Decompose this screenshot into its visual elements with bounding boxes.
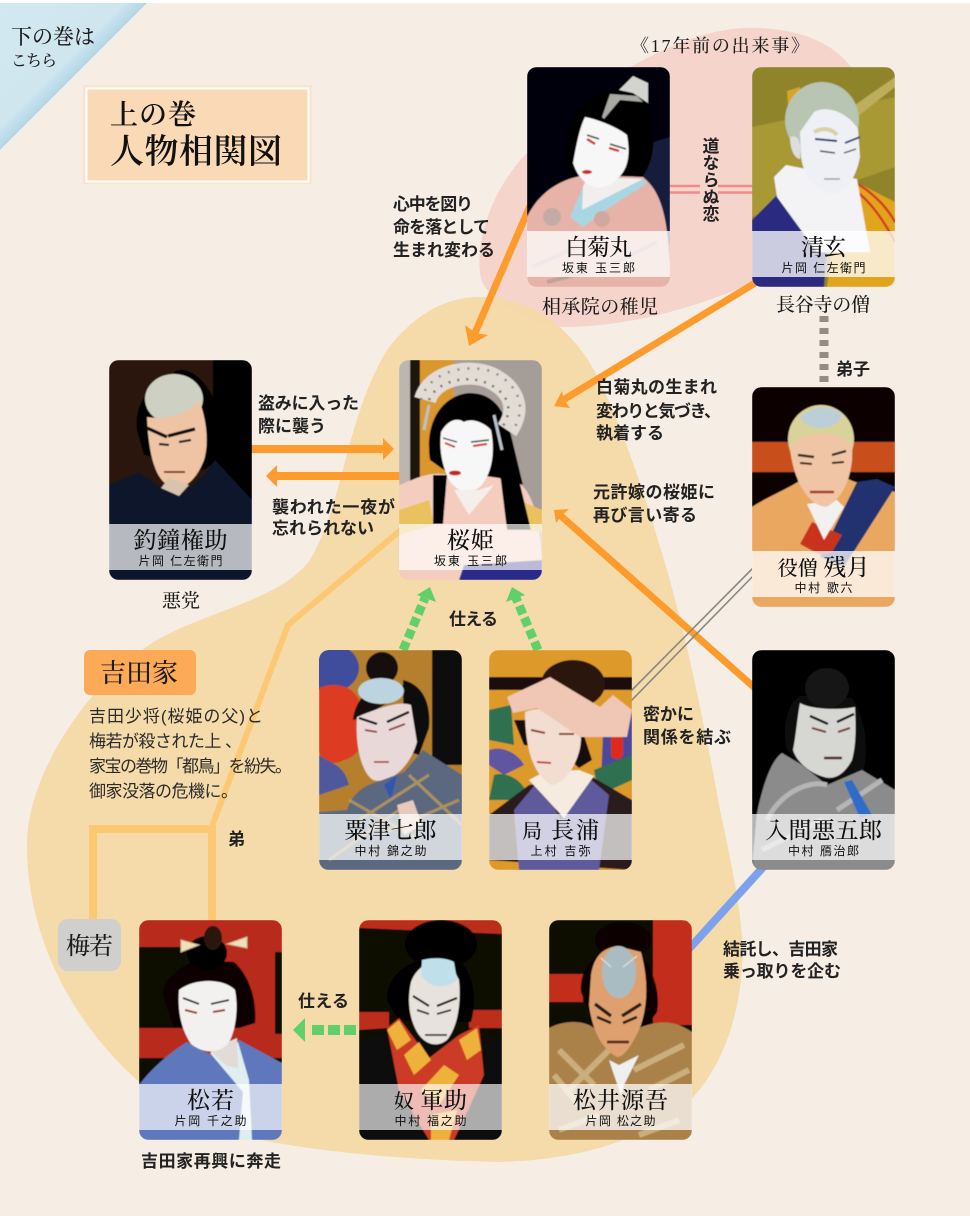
label: secret relationship	[643, 705, 731, 747]
label: forbidden love (vertical): 道ならぬ恋	[700, 137, 719, 222]
card: Shiragikumaru	[527, 67, 670, 287]
caption: Matsuwaka mission: 吉田家再興に奔走	[141, 1151, 281, 1171]
heading: Yoshida family	[84, 650, 196, 695]
line: Sakura to Matsuwaka family line	[93, 529, 402, 925]
card: Matsuwaka: 松若	[187, 1088, 234, 1113]
corner tab: link to the next volume: こちら	[11, 53, 57, 70]
card: Tsubone Nagaura: 上村 吉弥	[530, 843, 590, 858]
arrow: Gonsuke to Sakura	[250, 438, 394, 460]
caption: villain: 悪党	[162, 590, 200, 612]
text block: Yoshida family description: 家宝の巻物「都鳥」を紛失。	[89, 757, 292, 776]
label: cannot forget the night: 襲われた一夜が	[272, 497, 395, 517]
card: Seigen	[752, 67, 895, 287]
card: Yakko Gunsuke: 中村 福之助	[394, 1113, 466, 1128]
card: Yakko Gunsuke: 奴 軍助	[394, 1088, 467, 1113]
arrow: Iruma to Sakura	[554, 509, 756, 689]
label: attacks during burglary	[258, 394, 359, 436]
label: secret relationship: 密かに	[643, 705, 694, 724]
card: Tsubone Nagaura	[489, 650, 632, 870]
label: Seigen obsession	[596, 378, 721, 443]
label: collusion	[723, 939, 841, 981]
card: Matsui Gengo	[549, 920, 692, 1140]
label: serve Matsuwaka: 仕える	[298, 992, 349, 1011]
label: serve Sakura: 仕える	[449, 610, 498, 629]
label: collusion: 乗っ取りを企む	[723, 961, 841, 981]
line: forbidden love (double line)	[665, 180, 757, 198]
label: secret relationship: 関係を結ぶ	[643, 728, 731, 747]
label: reborn after double suicide: 命を落として	[393, 218, 490, 237]
card: Awazu Shichiro	[319, 650, 462, 870]
card: Zangetsu	[752, 387, 895, 607]
box: Umewaka: 梅若	[66, 933, 113, 960]
text block: Yoshida family description: 梅若が殺された上 、	[89, 732, 242, 751]
title panel	[83, 85, 312, 184]
label: collusion: 結託し、吉田家	[723, 939, 838, 959]
dashed arrow: Nagaura serves Sakura	[506, 587, 538, 650]
corner tab: link to the next volume: 下の巻は	[11, 25, 95, 49]
label: attacks during burglary: 盗みに入った	[258, 394, 359, 413]
card: Seigen: 片岡 仁左衛門	[782, 260, 866, 275]
box: Umewaka	[58, 919, 121, 971]
card: Tsubone Nagaura: 局 長浦	[522, 818, 599, 843]
card: Tsurigane Gonsuke: 片岡 仁左衛門	[138, 553, 222, 568]
label: former fiance approaches	[593, 482, 715, 525]
card: Awazu Shichiro: 粟津七郎	[344, 818, 436, 843]
title panel: 上の巻	[110, 99, 196, 131]
card: Matsuwaka: 片岡 千之助	[174, 1114, 246, 1128]
card: Iruma Akugoro: 入間悪五郎	[765, 818, 882, 843]
label: younger brother: 弟	[228, 830, 245, 849]
label: former fiance approaches: 元許嫁の桜姫に	[593, 482, 715, 502]
dashed line: disciple	[820, 316, 828, 392]
card: Yakko Gunsuke	[359, 920, 502, 1140]
card: Tsurigane Gonsuke	[109, 360, 252, 580]
label: disciple: 弟子	[836, 360, 870, 379]
arrow: Seigen to Sakura	[554, 280, 760, 408]
text block: Yoshida family description: 御家没落の危機に。	[89, 782, 238, 801]
label: cannot forget the night	[272, 497, 395, 538]
card: Seigen: 清玄	[801, 235, 847, 260]
label: reborn after double suicide: 心中を図り	[393, 195, 473, 214]
card: Sakura-hime	[399, 360, 542, 580]
label: Seigen obsession: 変わりと気づき、	[596, 402, 721, 421]
pink background blob: 17 years earlier	[479, 28, 860, 327]
card: Shiragikumaru: 白菊丸	[565, 235, 632, 260]
card: Zangetsu: 役僧 残月	[778, 555, 870, 580]
arrow: Shiragiku to Sakura	[465, 206, 530, 346]
card: Matsui Gengo: 片岡 松之助	[586, 1114, 656, 1128]
card: Tsurigane Gonsuke: 釣鐘権助	[134, 528, 228, 553]
card: Matsuwaka	[139, 920, 282, 1140]
label: reborn after double suicide	[393, 195, 495, 260]
card: Sakura-hime: 坂東 玉三郎	[434, 554, 507, 568]
line: collusion (blue)	[688, 864, 766, 950]
caption: Seigen role: 長谷寺の僧	[776, 294, 870, 316]
card: Zangetsu: 中村 歌六	[794, 580, 852, 595]
label: Seigen obsession: 執着する	[596, 423, 664, 443]
caption: events of 17 years ago: 《17年前の出来事》	[631, 35, 809, 56]
card: Iruma Akugoro	[752, 650, 895, 870]
label: reborn after double suicide: 生まれ変わる	[393, 241, 495, 260]
dashed arrow: Shichiro serves Sakura	[403, 587, 436, 650]
card: Matsui Gengo: 松井源吾	[573, 1088, 668, 1113]
label: Seigen obsession: 白菊丸の生まれ	[596, 378, 717, 397]
line: secret relation (grey double line)	[628, 565, 756, 704]
caption: Shiragiku role: 相承院の稚児	[542, 296, 658, 318]
label: cannot forget the night: 忘れられない	[272, 519, 374, 538]
card: Awazu Shichiro: 中村 錦之助	[354, 843, 426, 858]
card: Shiragikumaru: 坂東 玉三郎	[562, 261, 635, 275]
card: Iruma Akugoro: 中村 鴈治郎	[788, 843, 859, 858]
corner tab: link to the next volume	[0, 3, 147, 150]
arrow: Sakura to Gonsuke	[266, 465, 402, 487]
text block: Yoshida family description: 吉田少将(桜姫の父)と	[89, 707, 263, 726]
label: former fiance approaches: 再び言い寄る	[593, 506, 697, 525]
yellow background blob: Yoshida family	[27, 297, 743, 1162]
title panel: 人物相関図	[110, 133, 282, 171]
label: attacks during burglary: 際に襲う	[258, 417, 326, 436]
heading: Yoshida family: 吉田家	[100, 659, 178, 688]
dashed arrow: Gunsuke serves Matsuwaka	[293, 1018, 356, 1042]
card: Sakura-hime: 桜姫	[447, 528, 494, 553]
text block: Yoshida family description	[89, 707, 292, 801]
